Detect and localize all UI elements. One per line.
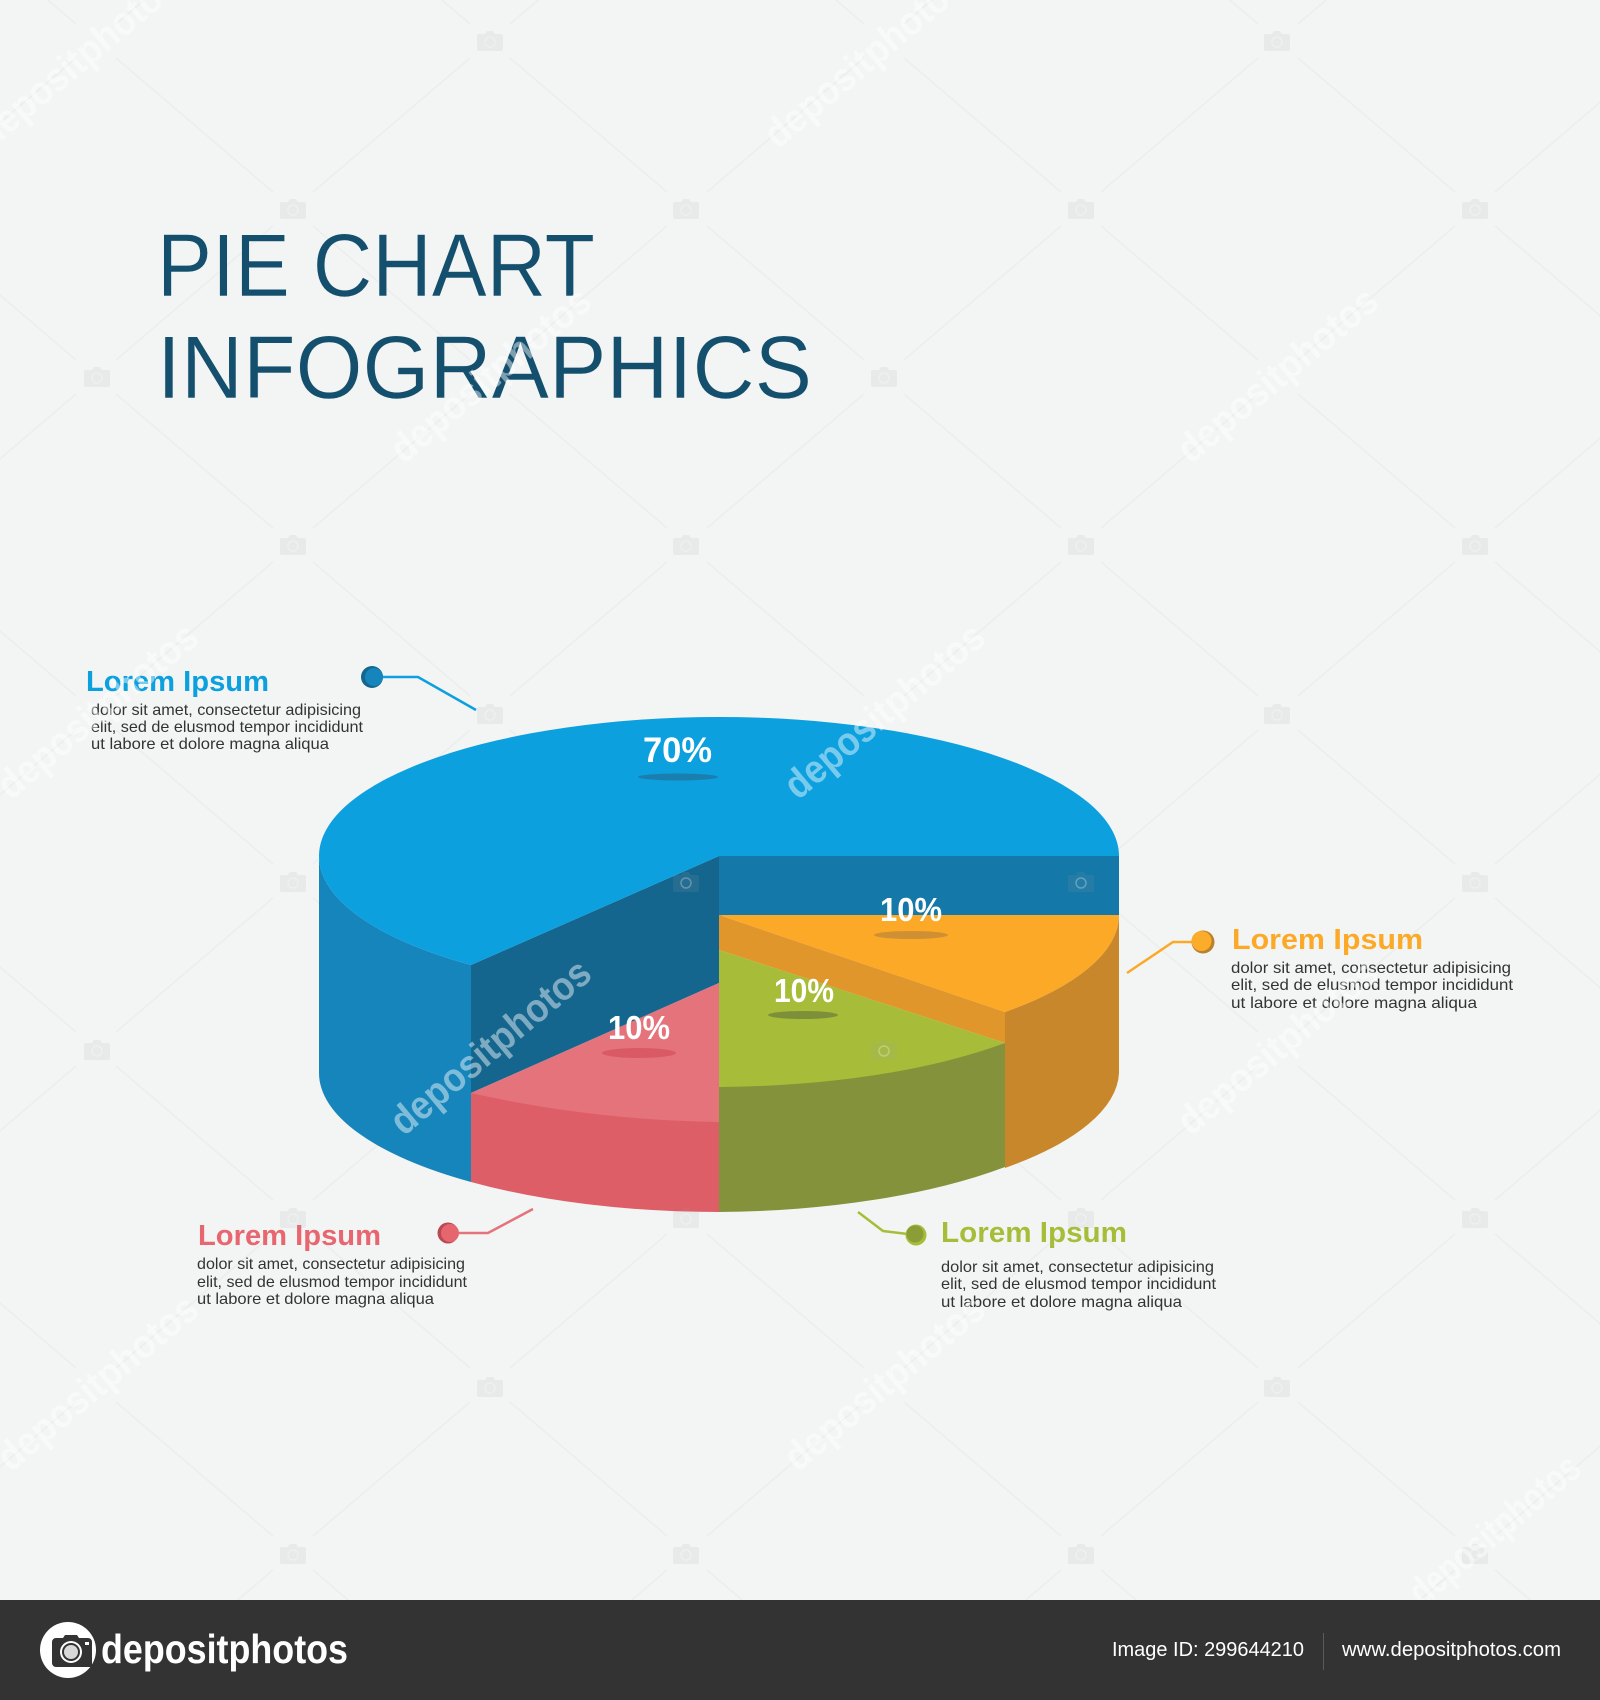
blue leader line and dot — [361, 666, 476, 710]
logo wordmark: depositphotos — [101, 1626, 348, 1672]
green side — [719, 1043, 1005, 1212]
title: INFOGRAPHICS — [157, 317, 812, 417]
orange body text: elit, sed de elusmod tempor incididunt — [1231, 977, 1514, 994]
blue inner wall right — [719, 856, 1119, 916]
pink leader line and dot — [438, 1209, 533, 1244]
green heading: Lorem Ipsum — [941, 1217, 1127, 1249]
title — [157, 215, 812, 417]
blue body text: ut labore et dolore magna aliqua — [91, 736, 329, 753]
website url: www.depositphotos.com — [1341, 1639, 1561, 1661]
pink body text: elit, sed de elusmod tempor incididunt — [197, 1274, 468, 1291]
blue body text: dolor sit amet, consectetur adipisicing — [91, 702, 361, 719]
watermark: depositphotos text: depositphotos — [382, 278, 600, 472]
3D pie chart — [319, 717, 1119, 1212]
callout: green — [858, 1212, 1217, 1311]
callout: orange — [1127, 924, 1514, 1012]
blue body text: elit, sed de elusmod tempor incididunt — [91, 719, 364, 736]
label: 10% orange — [874, 891, 948, 939]
watermark: depositphotos text: depositphotos — [382, 950, 600, 1144]
callout: pink — [197, 1209, 533, 1308]
green top slice — [719, 950, 1005, 1087]
orange inner wall — [719, 915, 1005, 1043]
label: 10% pink: 10% — [608, 1009, 670, 1046]
pink top slice — [471, 983, 719, 1122]
pink heading: Lorem Ipsum — [198, 1220, 381, 1252]
orange side — [1005, 915, 1119, 1168]
blue outer side — [319, 856, 471, 1182]
image id: Image ID: 299644210 — [1112, 1639, 1304, 1661]
pink body text — [197, 1256, 468, 1308]
orange leader line and dot — [1127, 930, 1214, 973]
orange heading: Lorem Ipsum — [1232, 924, 1423, 956]
watermark: camera icons — [84, 31, 1488, 1564]
pink body text: dolor sit amet, consectetur adipisicing — [197, 1256, 465, 1273]
pink body text: ut labore et dolore magna aliqua — [197, 1291, 434, 1308]
watermark: depositphotos text: depositphotos — [1169, 278, 1387, 472]
label: 70% — [638, 731, 718, 780]
watermark: depositphotos text: depositphotos — [1169, 950, 1387, 1144]
title: PIE CHART — [157, 215, 595, 315]
orange body text — [1231, 960, 1514, 1012]
green body text: ut labore et dolore magna aliqua — [941, 1294, 1182, 1311]
pink side — [471, 1093, 719, 1212]
orange top slice — [719, 915, 1119, 1012]
green body text: elit, sed de elusmod tempor incididunt — [941, 1276, 1217, 1293]
green body text — [941, 1259, 1217, 1311]
blue top slice — [319, 717, 1119, 965]
watermark: depositphotos text: depositphotos — [776, 1286, 994, 1480]
green body text: dolor sit amet, consectetur adipisicing — [941, 1259, 1214, 1276]
label: 10% orange: 10% — [880, 891, 942, 928]
blue body text — [91, 702, 364, 753]
blue heading: Lorem Ipsum — [86, 666, 269, 698]
orange body text: dolor sit amet, consectetur adipisicing — [1231, 960, 1511, 977]
label: 70%: 70% — [643, 731, 712, 770]
callout: blue — [86, 666, 476, 753]
green leader line and dot — [858, 1212, 926, 1246]
blue inner wall left — [471, 856, 719, 1093]
orange body text: ut labore et dolore magna aliqua — [1231, 995, 1477, 1012]
label: 10% green: 10% — [774, 972, 834, 1009]
footer bar — [0, 1600, 1600, 1700]
icon: camera logo — [40, 1622, 96, 1678]
watermark: depositphotos text: depositphotos — [776, 614, 994, 808]
label: 10% pink — [602, 1009, 676, 1058]
